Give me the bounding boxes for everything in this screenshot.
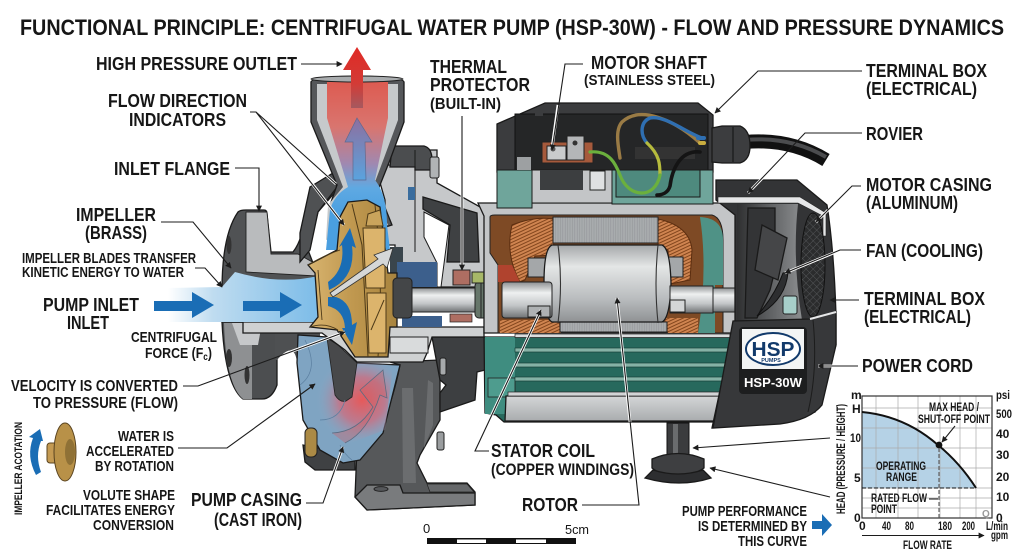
inlet flange — [222, 173, 337, 399]
x axis: L/min — [986, 519, 1008, 533]
fan grill — [801, 213, 825, 317]
chart annotations: Q — [982, 509, 990, 520]
x axis — [859, 519, 1008, 552]
neck arrow purple — [345, 118, 372, 180]
y axis: m — [851, 388, 862, 402]
fan blades — [745, 208, 788, 318]
x axis: 180 — [938, 519, 952, 533]
label: impeller brass: (BRASS) — [85, 223, 147, 243]
right axis: 0 — [996, 511, 1003, 525]
y axis: H — [852, 402, 861, 416]
impeller down arrow — [328, 297, 357, 345]
HSP name plate: HSP-30W — [744, 376, 802, 390]
operating range fill — [862, 412, 976, 488]
power cable and gland — [712, 126, 826, 163]
dark outlet arch — [300, 173, 337, 262]
inlet arrow two — [243, 292, 302, 318]
foot leader arrows — [693, 438, 830, 497]
label: pump performance note — [682, 503, 832, 550]
rotor — [502, 245, 738, 323]
scale bar — [423, 521, 589, 544]
label: terminal box lower: TERMINAL BOX — [864, 289, 985, 309]
casing body — [375, 146, 491, 353]
label: stator coil — [475, 310, 634, 479]
label: thermal protector: (BUILT-IN) — [430, 96, 501, 113]
chart grid — [862, 396, 992, 518]
impeller rotation inset: IMPELLER ACOTATION — [13, 422, 25, 515]
outlet neck with pressure gradient — [311, 76, 404, 250]
chart annotations: OPERATING — [876, 459, 926, 473]
label: fan cooling — [785, 241, 983, 273]
impeller up arrow — [328, 228, 356, 290]
label: stator coil: STATOR COIL — [491, 441, 595, 461]
label: pump performance note: THIS CURVE — [738, 533, 807, 550]
scale bar: 0 — [423, 521, 430, 536]
label: centrifugal force — [131, 329, 217, 363]
pressure diagonal arrow — [330, 248, 393, 297]
y axis: 5 — [854, 471, 861, 485]
label: rovier: ROVIER — [866, 124, 923, 144]
impeller — [308, 200, 397, 357]
label: terminal box top: TERMINAL BOX — [866, 61, 987, 81]
HSP name plate: HSP — [752, 339, 794, 361]
chart annotations: POINT — [871, 502, 897, 516]
x axis: 200 — [962, 519, 975, 533]
label: terminal box lower: (ELECTRICAL) — [864, 307, 971, 327]
y axis: 0 — [854, 511, 861, 525]
flow arrows — [154, 47, 393, 345]
label: inlet flange — [114, 159, 259, 211]
label: pump inlet: PUMP INLET — [43, 295, 139, 315]
label: velocity converted: TO PRESSURE (FLOW) — [33, 395, 178, 412]
motor support foot — [645, 423, 711, 483]
motor lower housing with fins — [484, 334, 732, 422]
y axis: HEAD (PRESSURE / HEIGHT) — [836, 404, 848, 514]
scale bar: 5cm — [565, 522, 589, 537]
lower casing band — [243, 322, 484, 362]
performance chart — [836, 388, 1012, 552]
label: pump casing: PUMP CASING — [191, 490, 302, 510]
right axis: 500 — [996, 407, 1012, 421]
label: motor shaft — [552, 53, 715, 150]
label: terminal box lower — [830, 289, 985, 327]
label: pump casing: (CAST IRON) — [214, 510, 302, 530]
label: motor casing: MOTOR CASING — [866, 175, 992, 195]
label: velocity converted: VELOCITY IS CONVERTED — [11, 378, 178, 395]
label: impeller blades note: KINETIC ENERGY TO WATER — [22, 265, 184, 281]
label: fan cooling: FAN (COOLING) — [866, 241, 983, 261]
label: inlet flange: INLET FLANGE — [114, 159, 230, 179]
outlet arrow red — [343, 47, 371, 108]
HSP name plate: PUMPS — [761, 358, 781, 364]
volute casing with pressure colouring — [297, 335, 400, 463]
pump cutaway illustration — [154, 47, 836, 510]
label: flow direction indicators: FLOW DIRECTION — [108, 91, 247, 111]
chart annotations: RATED FLOW — [871, 491, 927, 505]
chart annotations: SHUT-OFF POINT — [918, 412, 990, 426]
chart annotations: RANGE — [886, 470, 917, 484]
icon: blue arrow — [812, 514, 832, 536]
label: flow direction indicators: INDICATORS — [129, 110, 226, 130]
label: rotor: ROTOR — [522, 495, 578, 515]
label: impeller brass: IMPELLER — [76, 205, 156, 225]
right axis: 40 — [996, 427, 1010, 441]
pump feet and pedestal — [303, 337, 485, 510]
label: volute shape: CONVERSION — [93, 517, 174, 534]
label: pump performance note: PUMP PERFORMANCE — [682, 503, 807, 520]
seal and bearing — [393, 270, 503, 322]
label: volute shape — [46, 487, 175, 534]
y axis — [836, 388, 862, 525]
label: centrifugal force: c — [203, 352, 208, 363]
label: velocity converted — [11, 332, 345, 412]
x axis: 40 — [882, 519, 891, 533]
right axis — [996, 388, 1012, 525]
label: rotor — [522, 298, 639, 515]
label: power cord: POWER CORD — [862, 356, 973, 376]
chart annotations — [871, 400, 990, 520]
impeller rotation inset — [13, 422, 76, 515]
right axis: 20 — [996, 470, 1010, 484]
HSP name plate — [739, 327, 807, 394]
label: motor casing: (ALUMINUM) — [866, 193, 958, 213]
x axis: gpm — [991, 528, 1008, 542]
label: water accelerated: ACCELERATED — [86, 443, 174, 460]
label: impeller blades note: IMPELLER BLADES TRANSFER — [22, 251, 196, 267]
x axis: 80 — [905, 519, 914, 533]
icon: impeller — [47, 423, 76, 481]
right axis: 10 — [996, 490, 1010, 504]
label: volute shape: VOLUTE SHAPE — [83, 487, 175, 504]
label: motor shaft: MOTOR SHAFT — [591, 53, 707, 73]
label: motor shaft: (STAINLESS STEEL) — [584, 72, 715, 89]
inlet water flow band — [168, 272, 318, 322]
x axis: 0 — [859, 519, 866, 533]
label: water accelerated: WATER IS — [118, 428, 174, 445]
terminal box — [497, 103, 713, 208]
right axis: 30 — [996, 448, 1010, 462]
icon: rotation arrow — [29, 429, 43, 475]
fan cover — [712, 180, 836, 428]
wiring — [590, 115, 704, 195]
label: volute shape: FACILITATES ENERGY — [46, 502, 175, 519]
end housing — [713, 312, 836, 428]
label: water accelerated: BY ROTATION — [95, 458, 174, 475]
y axis: 10 — [850, 431, 861, 445]
label: rovier — [748, 124, 923, 193]
thermal switch terminals — [542, 136, 593, 163]
label: thermal protector: THERMAL — [430, 57, 507, 77]
label: terminal box top: (ELECTRICAL) — [866, 79, 977, 99]
label: stator coil: (COPPER WINDINGS) — [491, 460, 634, 479]
label: centrifugal force: CENTRIFUGAL — [131, 329, 217, 346]
label: thermal protector — [430, 57, 530, 270]
chart annotations: MAX HEAD / — [929, 400, 979, 414]
pump curve — [862, 412, 976, 488]
label: flow direction indicators — [108, 91, 344, 225]
label: water accelerated — [86, 384, 315, 475]
label: thermal protector: PROTECTOR — [430, 75, 530, 95]
shaft — [410, 288, 500, 312]
shut-off point marker — [936, 442, 942, 448]
label: impeller blades note — [22, 251, 222, 287]
label: impeller brass — [76, 205, 231, 268]
label: centrifugal force: ) — [208, 345, 212, 362]
label: high pressure outlet: HIGH PRESSURE OUTLET — [96, 54, 297, 74]
stator cavity with copper windings — [490, 215, 723, 333]
motor upper casing band — [478, 203, 737, 333]
label: pump performance note: IS DETERMINED BY — [698, 518, 807, 535]
inlet arrow one — [154, 292, 214, 318]
x axis: FLOW RATE — [903, 538, 952, 552]
label: centrifugal force: FORCE (F — [145, 345, 216, 362]
right axis: psi — [996, 388, 1010, 402]
label: pump inlet: INLET — [67, 313, 109, 333]
label: pump inlet — [43, 295, 139, 333]
label: terminal box top — [715, 61, 987, 113]
label: motor casing — [816, 175, 992, 222]
label: pump casing — [191, 447, 343, 530]
